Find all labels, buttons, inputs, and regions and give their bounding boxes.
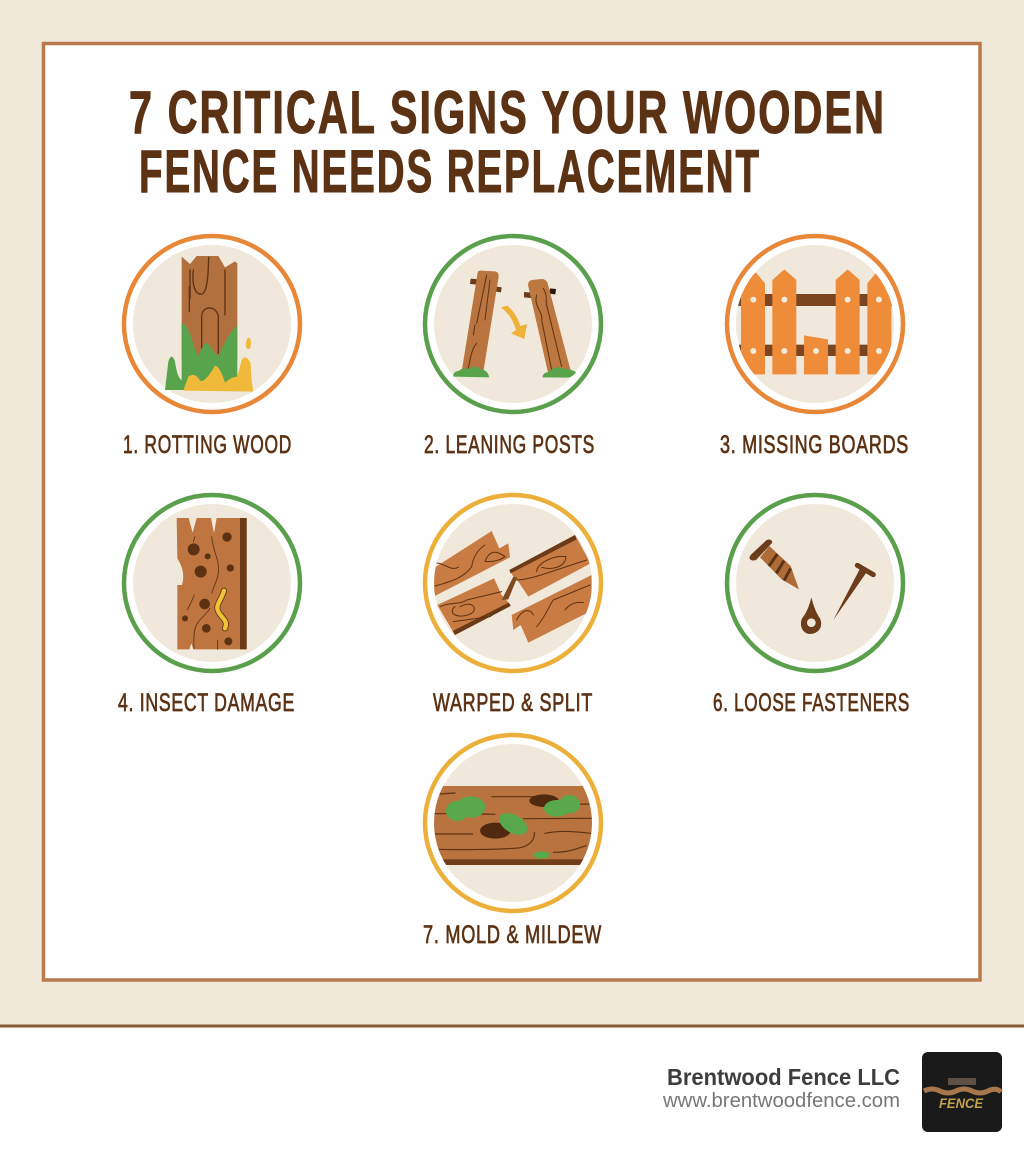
- sign 7: mold and mildew: [425, 735, 601, 911]
- icon: nail: [833, 565, 873, 620]
- sign 2: leaning posts: [425, 236, 601, 412]
- label: missing boards: 3. MISSING BOARDS: [720, 431, 909, 459]
- label: leaning posts: 2. LEANING POSTS: [424, 431, 595, 459]
- label: loose fasteners: 6. LOOSE FASTENERS: [713, 689, 910, 717]
- label: rotting wood: 1. ROTTING WOOD: [123, 431, 292, 459]
- label: insect damage: 4. INSECT DAMAGE: [118, 689, 295, 717]
- title: [129, 79, 886, 205]
- sign 4: insect damage: [124, 495, 300, 671]
- footer: [0, 1024, 1024, 1154]
- sign 6: loose fasteners: [727, 495, 903, 671]
- arrow: leaning direction: [501, 306, 527, 339]
- label: mold and mildew: 7. MOLD & MILDEW: [423, 921, 602, 949]
- website: www.brentwoodfence.com: [662, 1090, 900, 1112]
- brand name: Brentwood Fence LLC: [667, 1064, 900, 1090]
- logo: [922, 1052, 1002, 1132]
- sign 5: warped and split: [425, 495, 601, 671]
- logo: FENCE: [939, 1095, 984, 1111]
- sign 3: missing boards: [727, 236, 903, 412]
- sign 1: rotting wood: [124, 236, 300, 412]
- icon: washer drop: [801, 597, 821, 634]
- label: warped and split: WARPED & SPLIT: [433, 689, 593, 717]
- white framed panel: [44, 44, 980, 980]
- icon: screw: [749, 540, 799, 589]
